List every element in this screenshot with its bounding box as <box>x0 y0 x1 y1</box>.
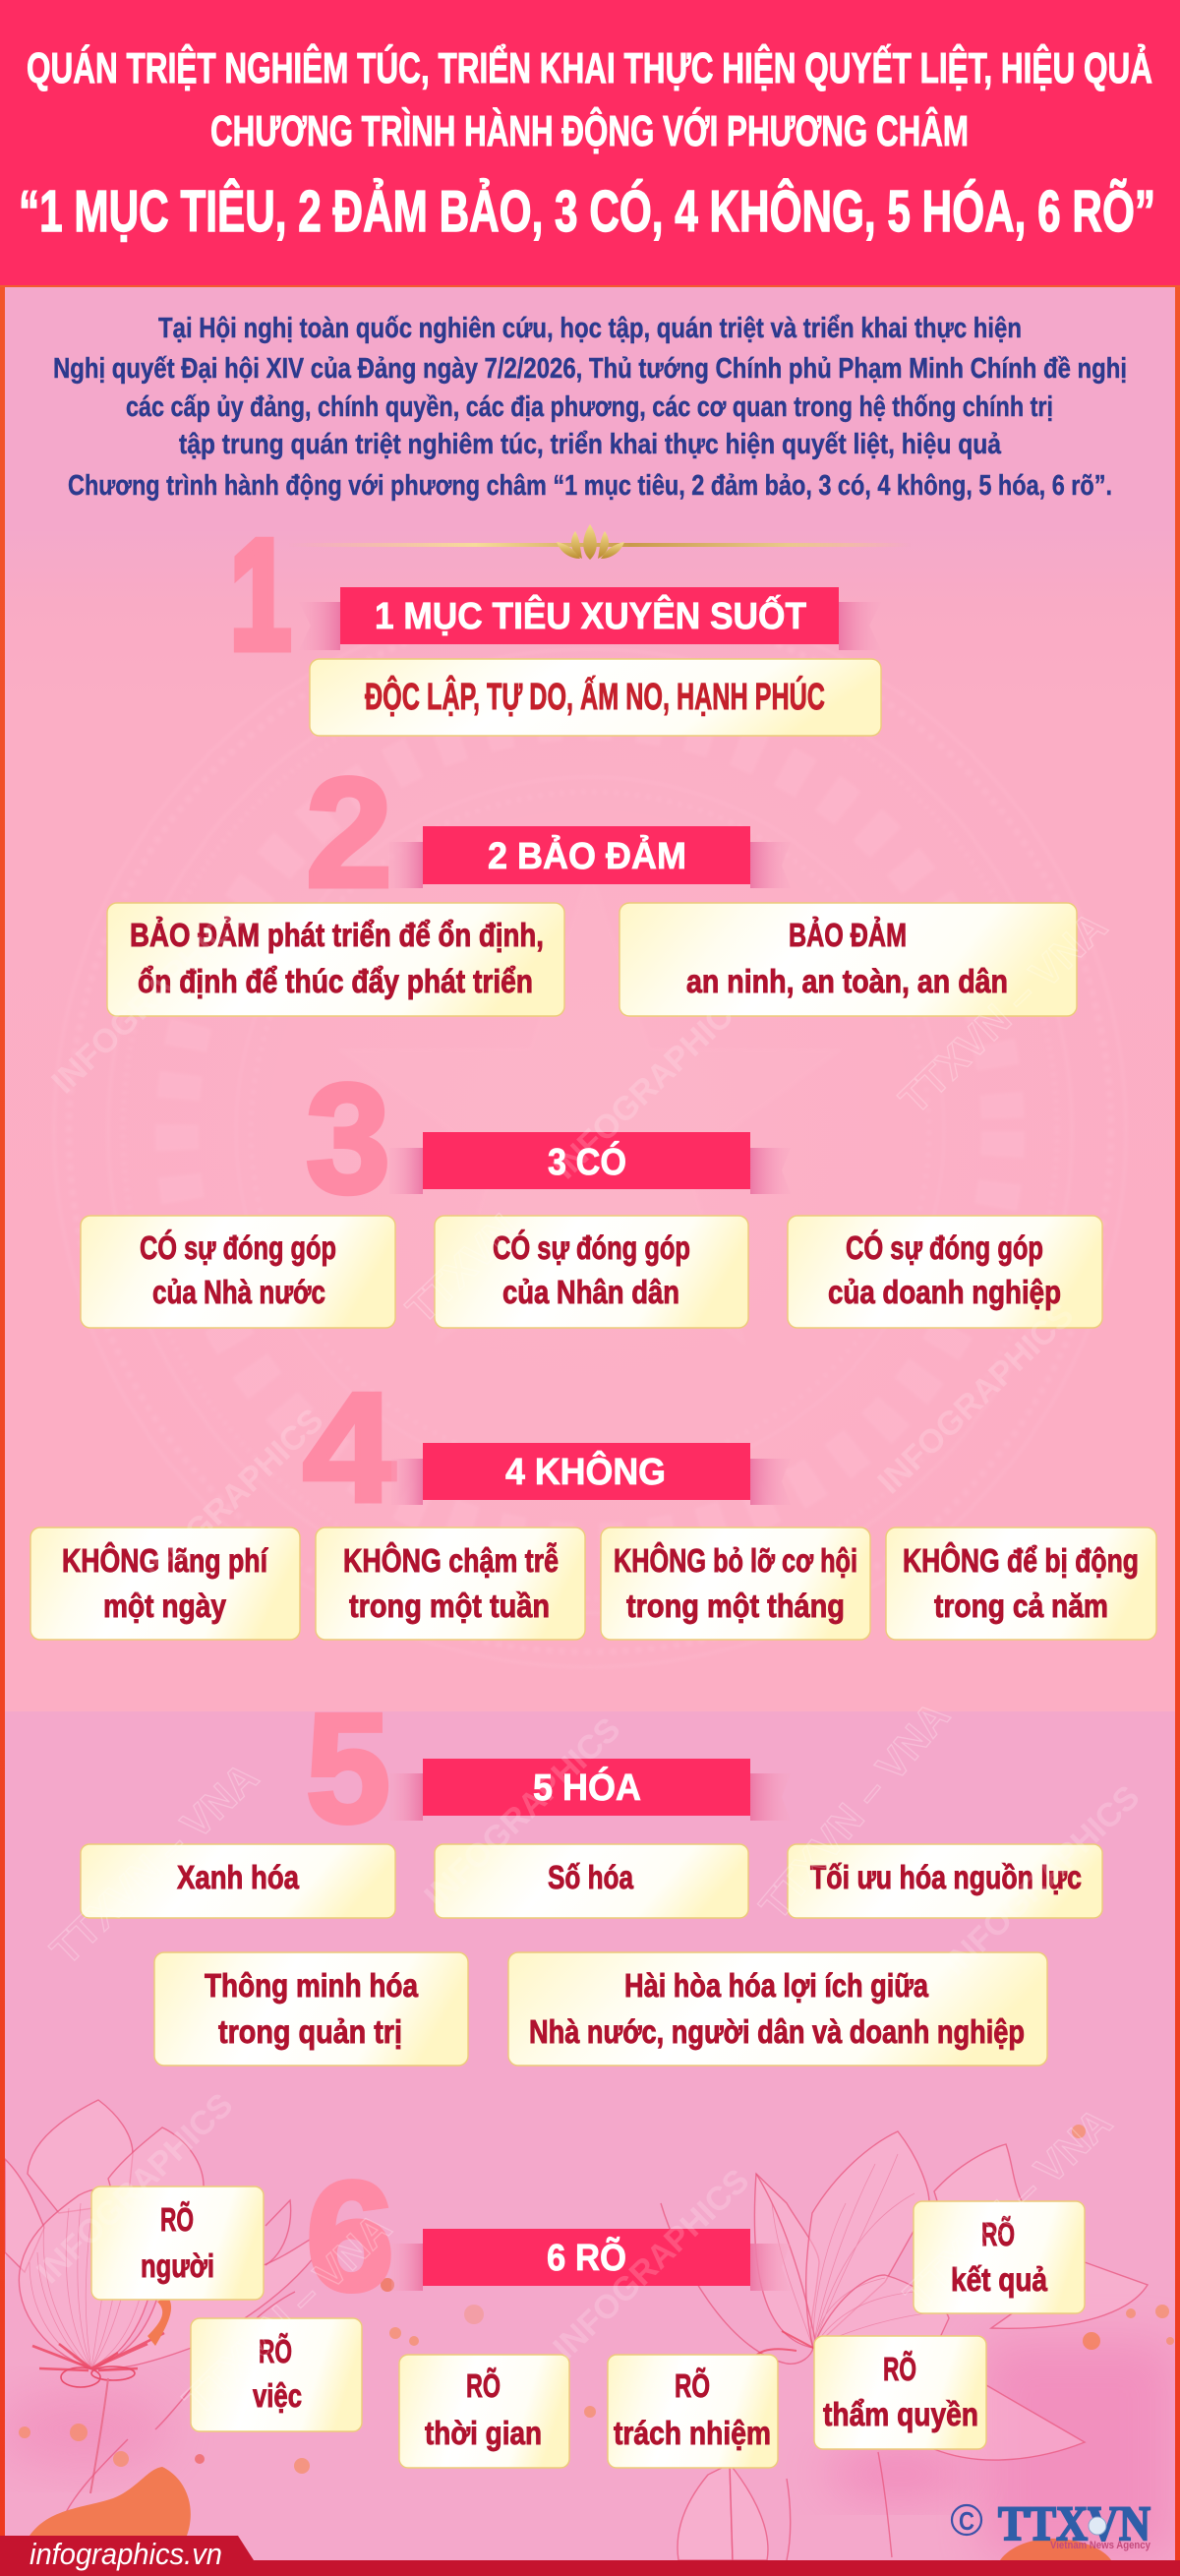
card: smart governance: trong quản trị <box>218 2013 402 2050</box>
watermarks: TTXVN – VNA <box>41 1754 266 1973</box>
right ribbon tail <box>750 2244 791 2291</box>
section 5: five transformations <box>81 1682 1102 2066</box>
card: no waste: một ngày <box>103 1588 227 1624</box>
card: people <box>435 1216 748 1328</box>
heading text: 6 RÕ <box>547 2236 626 2279</box>
right ribbon tail <box>839 602 881 650</box>
card: responsibility: RÕ <box>675 2367 710 2404</box>
logo: TTXVN <box>952 2495 1151 2551</box>
card: no waste: KHÔNG lãng phí <box>62 1541 268 1579</box>
card: time <box>399 2355 569 2468</box>
footer bar with site name <box>0 2536 1180 2576</box>
intro text block: tập trung quán triệt nghiêm túc, triển khai thực hiện quyết liệt, hiệu quả <box>179 429 1002 460</box>
watermarks: INFOGRAPHICS <box>30 2086 240 2291</box>
card: no waste <box>30 1528 300 1640</box>
card: people: RÕ <box>160 2201 194 2238</box>
heading bar <box>423 1443 750 1500</box>
card: people: CÓ sự đóng góp <box>493 1229 690 1266</box>
globe <box>1089 2517 1106 2535</box>
card: no passivity <box>886 1528 1156 1640</box>
left ribbon tail <box>389 1148 423 1194</box>
card: authority <box>814 2336 986 2449</box>
card: green: Xanh hóa <box>177 1859 300 1895</box>
card: results: RÕ <box>981 2216 1015 2252</box>
card: digital <box>435 1844 748 1918</box>
illustration: left lotus <box>5 2100 334 2536</box>
card: digital: Số hóa <box>548 1859 634 1895</box>
card: harmonised interests: Nhà nước, người dân và doanh nghiệp <box>529 2013 1025 2050</box>
section 4: four nos <box>30 1361 1156 1640</box>
heading bar <box>340 587 839 644</box>
card: people <box>91 2187 264 2300</box>
big number 1: 1 <box>230 509 291 682</box>
big number 5: 5 <box>306 1682 390 1855</box>
heading text: 3 CÓ <box>548 1140 626 1183</box>
illustration: orange paint splashes <box>19 2125 1174 2474</box>
heading bar <box>423 2229 750 2286</box>
left ribbon tail <box>391 1459 423 1505</box>
right edge line <box>1175 287 1180 2560</box>
right ribbon tail <box>750 1459 791 1505</box>
card: work: RÕ <box>259 2333 292 2369</box>
card: state: của Nhà nước <box>152 1274 325 1310</box>
card: people: của Nhân dân <box>502 1274 679 1310</box>
card: no missed chance: KHÔNG bỏ lỡ cơ hội <box>614 1541 857 1579</box>
panel: lower section background <box>0 1711 1180 2576</box>
card: state <box>81 1216 395 1328</box>
watermarks <box>30 896 1147 2424</box>
heading text: 2 BẢO ĐẢM <box>488 834 686 877</box>
card: guarantee 2: BẢO ĐẢM <box>789 917 907 953</box>
logo: TTXVN: C <box>959 2506 974 2536</box>
card: no passivity: trong cả năm <box>934 1588 1108 1624</box>
card: smart governance: Thông minh hóa <box>205 1967 419 2004</box>
watermarks: TTXVN – VNA <box>890 903 1115 1122</box>
card: responsibility: trách nhiệm <box>614 2415 771 2451</box>
card: authority: thẩm quyền <box>823 2396 978 2432</box>
big number 2: 2 <box>306 747 392 920</box>
heading bar <box>423 826 750 884</box>
card: guarantee 1: BẢO ĐẢM phát triển để ổn định, <box>130 917 544 953</box>
card: results: kết quả <box>951 2261 1048 2298</box>
card: goal <box>310 659 881 736</box>
watermarks: TTXVN – VNA <box>750 1693 959 1928</box>
big number 3: 3 <box>306 1052 390 1226</box>
card: guarantee 2: an ninh, an toàn, an dân <box>686 963 1008 999</box>
right ribbon tail <box>750 842 791 888</box>
card: harmonised interests <box>508 1952 1047 2066</box>
intro text block: Tại Hội nghị toàn quốc nghiên cứu, học tập, quán triệt và triển khai thực hiện <box>158 313 1022 344</box>
card: work: việc <box>253 2377 302 2414</box>
section 2: two guarantees <box>107 747 1077 1016</box>
heading bar <box>423 1759 750 1816</box>
card: no delay: KHÔNG chậm trễ <box>343 1541 559 1579</box>
card: enterprises: của doanh nghiệp <box>828 1274 1061 1310</box>
card: no missed chance: trong một tháng <box>626 1588 845 1624</box>
card: resources: Tối ưu hóa nguồn lực <box>810 1859 1082 1895</box>
card: no missed chance <box>601 1528 870 1640</box>
watermarks: INFOGRAPHICS <box>417 1710 627 1915</box>
card: guarantee 1 <box>107 903 564 1016</box>
watermarks: INFOGRAPHICS <box>936 1778 1147 1983</box>
watermarks: TTXVN <box>397 1205 527 1332</box>
card: green <box>81 1844 395 1918</box>
watermarks: INFOGRAPHICS <box>870 1296 1081 1501</box>
card: harmonised interests: Hài hòa hóa lợi ích giữa <box>624 1967 929 2004</box>
left ribbon tail <box>389 1773 423 1821</box>
heading bar <box>423 1132 750 1189</box>
card: no delay: trong một tuần <box>349 1588 550 1624</box>
watermarks: INFOGRAPHICS <box>120 1402 330 1606</box>
card: goal: ĐỘC LẬP, TỰ DO, ẤM NO, HẠNH PHÚC <box>365 674 825 718</box>
watermarks: INFOGRAPHICS <box>44 896 255 1101</box>
card: enterprises <box>788 1216 1102 1328</box>
watermarks: TTXVN – VNA <box>174 2204 399 2424</box>
watermarks: INFOGRAPHICS <box>546 982 756 1186</box>
agency wordmark: TTXVN <box>998 2495 1150 2550</box>
left edge line <box>0 287 5 2560</box>
card: smart governance <box>154 1952 468 2066</box>
card: resources <box>788 1844 1102 1918</box>
big number 6: 6 <box>306 2150 394 2323</box>
footer bar with site name: infographics.vn <box>30 2537 222 2571</box>
watermarks: INFOGRAPHICS <box>546 2162 756 2366</box>
section 6: six clarities <box>91 2150 1085 2468</box>
copyright mark <box>952 2505 981 2535</box>
section 1: one goal <box>230 509 881 736</box>
heading text: 5 HÓA <box>533 1766 641 1809</box>
left ribbon tail <box>391 2244 423 2291</box>
illustration: right lotus <box>661 2131 1148 2560</box>
divider with gold lotus <box>288 524 911 560</box>
intro text block <box>53 313 1127 502</box>
card: authority: RÕ <box>883 2351 916 2387</box>
big number 4: 4 <box>303 1361 395 1534</box>
left ribbon tail <box>299 602 340 650</box>
card: time: RÕ <box>466 2367 501 2404</box>
card: results <box>914 2201 1085 2313</box>
left ribbon tail <box>389 842 423 888</box>
heading text: 4 KHÔNG <box>505 1449 666 1493</box>
card: people: người <box>141 2247 214 2284</box>
heading text: 1 MỤC TIÊU XUYÊN SUỐT <box>375 593 806 637</box>
right ribbon tail <box>750 1148 791 1194</box>
card: time: thời gian <box>425 2415 542 2451</box>
card: guarantee 1: ổn định để thúc đẩy phát triển <box>138 963 533 999</box>
watermarks: TTXVN – VNA <box>895 2099 1120 2318</box>
card: guarantee 2 <box>620 903 1077 1016</box>
right ribbon tail <box>750 1773 791 1821</box>
card: enterprises: CÓ sự đóng góp <box>846 1229 1043 1266</box>
card: no delay <box>316 1528 585 1640</box>
agency tagline: Vietnam News Agency <box>1050 2540 1151 2551</box>
background emblem: bronze drum pattern <box>54 595 1126 1667</box>
title banner <box>0 0 1180 287</box>
card: responsibility <box>608 2355 778 2468</box>
section 3: three contributions <box>81 1052 1102 1328</box>
card: work <box>191 2318 362 2431</box>
card: state: CÓ sự đóng góp <box>140 1229 336 1266</box>
